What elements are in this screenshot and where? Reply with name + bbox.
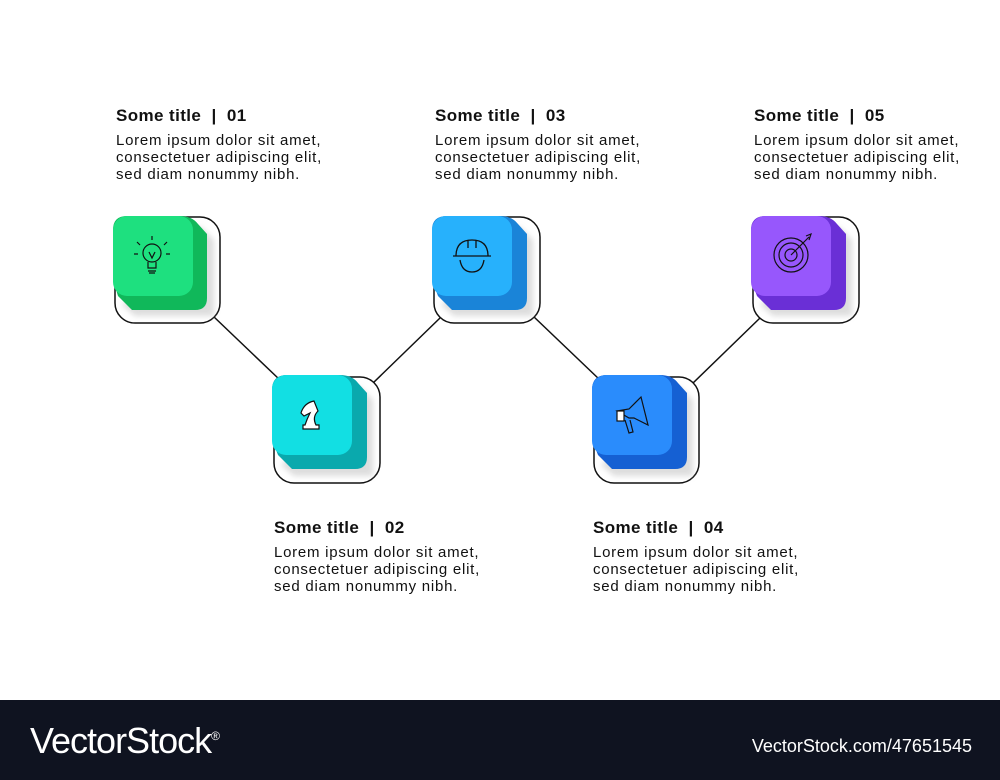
text 01: consectetuer adipiscing elit, bbox=[116, 149, 322, 166]
text 05: Lorem ipsum dolor sit amet, bbox=[754, 132, 959, 149]
footer: VectorStock.com/47651545 bbox=[752, 736, 972, 756]
text 02 bbox=[274, 518, 480, 595]
footer bbox=[0, 700, 1000, 780]
text 02: sed diam nonummy nibh. bbox=[274, 578, 458, 595]
box 5 bbox=[751, 216, 859, 323]
box 4 bbox=[592, 375, 699, 483]
text 03: sed diam nonummy nibh. bbox=[435, 166, 619, 183]
text 03: Some title | 03 bbox=[435, 106, 566, 125]
text 04: Some title | 04 bbox=[593, 518, 724, 537]
text 04 bbox=[593, 518, 799, 595]
box 1 bbox=[113, 216, 220, 323]
text 04: consectetuer adipiscing elit, bbox=[593, 561, 799, 578]
text 04: Lorem ipsum dolor sit amet, bbox=[593, 544, 798, 561]
text 02: consectetuer adipiscing elit, bbox=[274, 561, 480, 578]
text 01: Some title | 01 bbox=[116, 106, 247, 125]
text 02: Lorem ipsum dolor sit amet, bbox=[274, 544, 479, 561]
text 03: consectetuer adipiscing elit, bbox=[435, 149, 641, 166]
text 02: Some title | 02 bbox=[274, 518, 405, 537]
text 03: Lorem ipsum dolor sit amet, bbox=[435, 132, 640, 149]
text 01: Lorem ipsum dolor sit amet, bbox=[116, 132, 321, 149]
footer: VectorStock® bbox=[30, 720, 219, 761]
box 2 bbox=[272, 375, 380, 483]
text 05 bbox=[754, 106, 960, 183]
text 03 bbox=[435, 106, 641, 183]
text 01: sed diam nonummy nibh. bbox=[116, 166, 300, 183]
box 3 bbox=[432, 216, 540, 323]
text 05: sed diam nonummy nibh. bbox=[754, 166, 938, 183]
text 01 bbox=[116, 106, 322, 183]
text 04: sed diam nonummy nibh. bbox=[593, 578, 777, 595]
text 05: consectetuer adipiscing elit, bbox=[754, 149, 960, 166]
text 05: Some title | 05 bbox=[754, 106, 885, 125]
